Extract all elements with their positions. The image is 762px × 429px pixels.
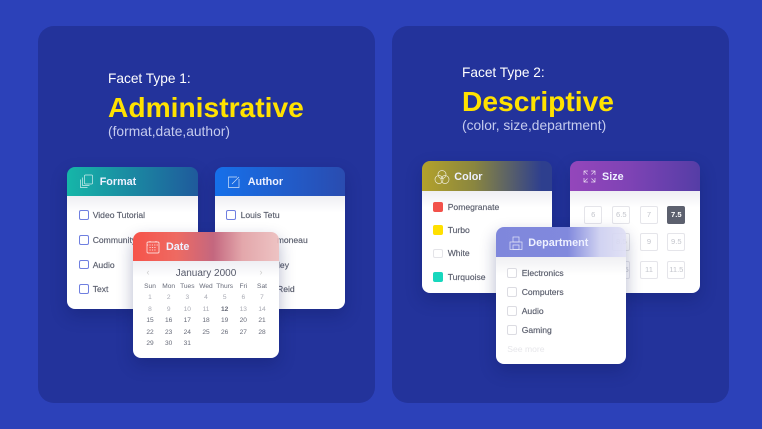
heading: Administrative: Administrative <box>108 91 304 123</box>
panel: descriptive facets <box>392 26 729 403</box>
subheading: color, size, department: (color, size,department) <box>462 118 606 133</box>
week 2: 8 <box>148 306 152 313</box>
week 1 <box>148 294 264 301</box>
icon: stacked pages <box>80 174 93 188</box>
header label: Department: Department <box>528 236 588 248</box>
weekday row: Mon <box>162 283 175 290</box>
week 5: 29 <box>146 340 154 347</box>
checkbox <box>226 210 236 220</box>
month label: January 2000 <box>176 268 236 278</box>
option: Computers: Computers <box>522 287 564 297</box>
checkbox <box>507 268 517 278</box>
subheading: format, date, author: (format,date,author) <box>108 124 230 139</box>
size tile 9: 9 <box>647 237 651 246</box>
heading: Descriptive: Descriptive <box>462 85 614 117</box>
next month arrow: › <box>260 267 262 277</box>
format options list <box>67 196 198 309</box>
swatch: turquoise <box>433 272 443 282</box>
header label: Color: Color <box>454 170 482 182</box>
size tile 6 <box>584 206 602 224</box>
heading kicker: Facet Type 2: Facet Type 2: <box>462 64 545 80</box>
week 1: 7 <box>260 294 264 301</box>
weekday row: Sat <box>257 283 267 290</box>
partly hidden option: ley <box>278 260 289 270</box>
week 4: 22 <box>146 329 154 336</box>
checkbox <box>79 260 89 269</box>
week 3: 17 <box>184 317 191 324</box>
size tile 10.5: 10.5 <box>614 265 629 274</box>
size tile 11 <box>640 261 658 279</box>
week 2: 13 <box>240 306 247 313</box>
week 2: 12 <box>221 306 228 313</box>
week 5 <box>146 340 191 347</box>
checkbox <box>79 210 89 220</box>
week 1: 3 <box>185 294 189 301</box>
swatch: pomegranate <box>433 202 443 212</box>
week 4: 23 <box>165 329 172 336</box>
size tile 7 <box>640 206 658 224</box>
week 4: 28 <box>258 329 266 336</box>
option: White: White <box>448 248 470 258</box>
weekday row: Sun <box>144 283 156 290</box>
checkbox <box>79 284 89 294</box>
size tile 11.5: 11.5 <box>669 265 683 274</box>
weekday row: Tues <box>180 283 194 290</box>
option: Video Tutorial: Video Tutorial <box>93 210 145 220</box>
weekday row <box>144 283 267 290</box>
icon: overlapping circles <box>434 170 450 184</box>
week 1: 4 <box>204 294 208 301</box>
week 3: 18 <box>202 317 210 324</box>
weekday row: Thurs <box>216 283 233 290</box>
color options list <box>422 191 552 293</box>
size tile 6.5 <box>612 206 630 224</box>
card: Color <box>422 161 552 293</box>
card header: Size <box>570 161 700 191</box>
option: Louis Tetu: Louis Tetu <box>241 210 280 220</box>
option: Turquoise: Turquoise <box>448 272 486 282</box>
icon: expand arrows <box>584 170 596 182</box>
week 3: 20 <box>240 317 247 324</box>
card: Department <box>496 227 626 364</box>
week 2: 10 <box>184 306 191 313</box>
size tile 11: 11 <box>645 265 653 274</box>
size tile 6.5: 6.5 <box>616 210 627 219</box>
header label: Format: Format <box>100 176 136 188</box>
option: Turbo: Turbo <box>448 225 470 235</box>
size tile 11.5 <box>667 261 685 279</box>
option: Community: Community <box>93 235 136 245</box>
size tile 7.5 selected: 7.5 <box>671 210 682 219</box>
week 3: 21 <box>258 317 266 324</box>
icon: edit square <box>228 176 240 188</box>
card: Format <box>67 167 198 309</box>
option: Audio: Audio <box>522 306 544 316</box>
card header: Author <box>215 167 345 196</box>
week 5: 30 <box>165 340 172 347</box>
size tile 9.5: 9.5 <box>671 237 682 246</box>
header label: Date: Date <box>166 241 189 253</box>
icon: calendar <box>146 241 160 254</box>
weekday row: Wed <box>199 283 213 290</box>
week 1: 5 <box>223 294 227 301</box>
header label: Size: Size <box>602 170 624 182</box>
option: Text: Text <box>93 284 108 294</box>
week 4: 26 <box>221 329 228 336</box>
checkbox <box>507 325 517 335</box>
card: Author <box>215 167 345 309</box>
weekday row: Fri <box>239 283 247 290</box>
week 5: 31 <box>184 340 191 347</box>
week 4: 24 <box>184 329 191 336</box>
panel: administrative facets <box>38 26 375 403</box>
previous month arrow: ‹ <box>146 267 150 277</box>
size tile 9.5 <box>667 233 685 251</box>
size tile 9 <box>640 233 658 251</box>
calendar <box>133 261 279 358</box>
card: Date <box>133 232 279 358</box>
week 3: 19 <box>221 317 228 324</box>
week 2 <box>148 306 266 313</box>
link: See more: See more <box>507 344 545 354</box>
checkbox <box>79 235 89 245</box>
week 1: 2 <box>167 294 171 301</box>
week 3: 15 <box>146 317 154 324</box>
week 3: 16 <box>165 317 172 324</box>
week 4: 27 <box>240 329 247 336</box>
partly hidden option: Reid <box>277 284 295 294</box>
week 1: 1 <box>148 294 152 301</box>
size tile 10.5 <box>612 261 630 279</box>
week 2: 14 <box>258 306 266 313</box>
card header: Color <box>422 161 552 191</box>
option: Gaming: Gaming <box>522 325 552 335</box>
swatch: turbo <box>433 225 443 235</box>
week 1: 6 <box>241 294 245 301</box>
card header: Format <box>67 167 198 196</box>
option: Pomegranate: Pomegranate <box>448 202 499 212</box>
size tile 7: 7 <box>647 210 651 219</box>
week 4: 25 <box>202 329 210 336</box>
card header: Department <box>496 227 626 257</box>
week 2: 11 <box>203 306 209 313</box>
card header: Date <box>133 232 279 261</box>
size tile 8.5 <box>612 233 630 251</box>
icon: building <box>510 236 522 250</box>
partly hidden option: moneau <box>277 235 308 245</box>
size tile 6: 6 <box>591 210 595 219</box>
department options list <box>496 257 626 364</box>
option: Electronics: Electronics <box>522 268 564 278</box>
size tile grid <box>570 191 700 293</box>
week 2: 9 <box>167 306 171 313</box>
author options list <box>215 196 345 309</box>
week 4 <box>146 329 266 336</box>
week 3 <box>146 317 266 324</box>
size tile 7.5 selected <box>667 206 685 224</box>
header label: Author: Author <box>248 176 283 188</box>
checkbox <box>507 287 517 297</box>
swatch: white <box>433 248 443 258</box>
size tile 8.5: 8.5 <box>616 237 627 246</box>
checkbox <box>507 306 517 316</box>
heading kicker: Facet Type 1: Facet Type 1: <box>108 70 191 86</box>
option: Audio: Audio <box>93 260 115 270</box>
card: Size <box>570 161 700 293</box>
